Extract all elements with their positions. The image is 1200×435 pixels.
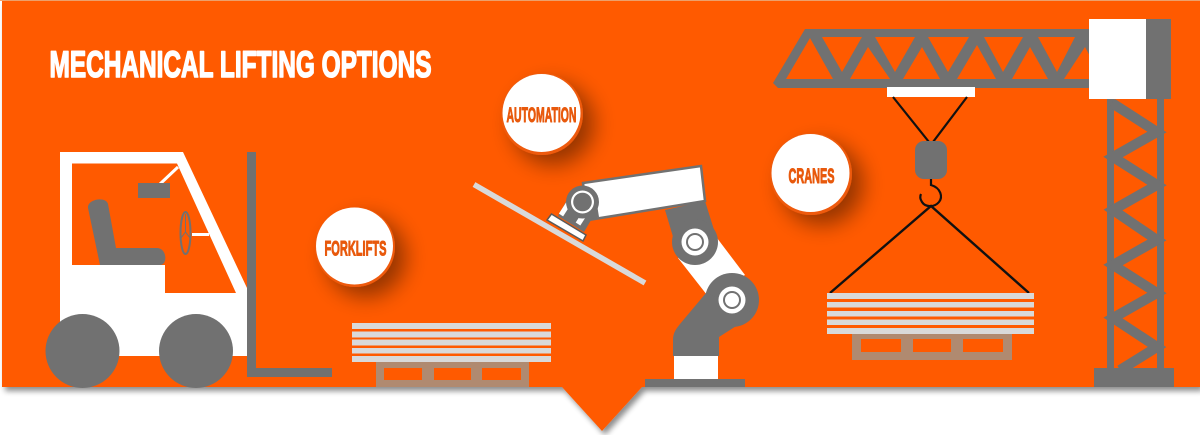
robot wrist joint	[566, 186, 599, 220]
forklift front wheel	[159, 314, 233, 388]
robot upper joint	[682, 228, 708, 256]
crane upper cables	[893, 97, 967, 142]
title: MECHANICAL LIFTING OPTIONS	[50, 44, 432, 85]
forklift body and cab	[60, 152, 247, 356]
forklift rear wheel	[46, 314, 120, 388]
forklift dashboard box	[138, 183, 170, 198]
forklift pallet load	[352, 323, 551, 387]
crane cabin white	[1089, 19, 1146, 99]
robot upper arm	[583, 166, 705, 220]
tower crane illustration	[773, 19, 1174, 387]
robot forearm	[678, 238, 745, 295]
crane cabin grey	[1146, 19, 1171, 99]
cranes badge	[770, 133, 852, 215]
crane tower base	[1094, 368, 1174, 387]
crane sling cables	[830, 206, 1029, 293]
robot lower housing	[673, 273, 759, 356]
robot white base	[674, 356, 718, 380]
forklift mast and fork	[247, 152, 332, 377]
forklift illustration	[46, 152, 332, 388]
crane hook block	[915, 141, 947, 179]
automation badge: AUTOMATION	[506, 104, 576, 127]
robot elbow link	[665, 201, 717, 265]
robot gripper plate	[547, 214, 586, 241]
crane stacked sheets	[827, 293, 1034, 334]
crane trolley	[887, 87, 975, 97]
forklift seat	[88, 199, 165, 265]
forklifts badge	[315, 207, 395, 287]
automation badge	[501, 73, 583, 155]
crane hook	[920, 179, 941, 206]
robot gripper fork	[558, 196, 597, 232]
robot elbow housing	[672, 219, 718, 265]
cranes badge: CRANES	[788, 165, 834, 188]
robot arm illustration	[474, 166, 759, 387]
robot lower joint	[718, 286, 746, 314]
stacked sheets	[352, 323, 551, 362]
crane tower	[1107, 99, 1164, 370]
crane pallet	[852, 334, 1012, 360]
forklift mirror arm	[160, 167, 178, 184]
forklift steering column	[192, 233, 209, 236]
pallet	[376, 362, 529, 387]
lifted sheet	[474, 184, 645, 283]
crane boom truss	[773, 29, 1092, 88]
forklift steering wheel	[180, 212, 190, 254]
forklifts badge: FORKLIFTS	[324, 238, 386, 260]
robot base plate	[645, 379, 745, 387]
